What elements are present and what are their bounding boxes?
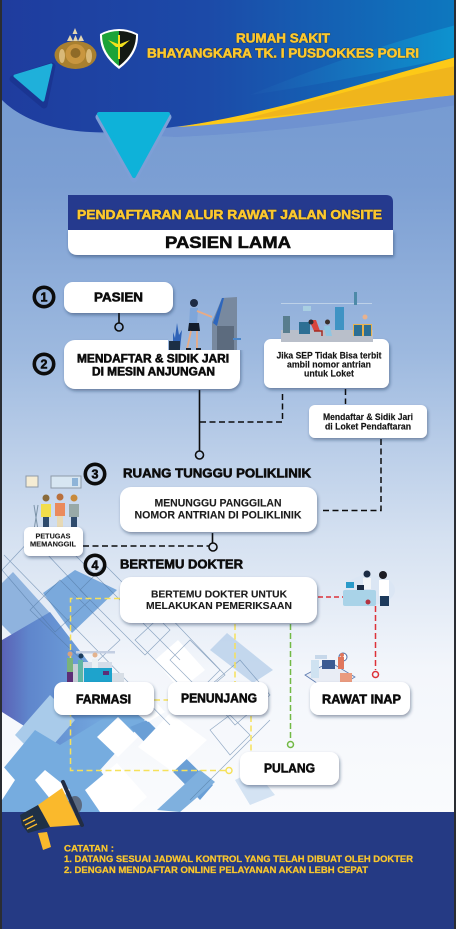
box: penunjang <box>168 682 268 715</box>
illustration: inpatient room <box>305 653 355 692</box>
box: jika SEP tidak bisa terbit: Jika SEP Tidak Bisa terbit <box>276 350 382 360</box>
step 2 badge <box>34 354 54 374</box>
footer notes: 1. DATANG SESUAI JADWAL KONTROL YANG TELAH DIBUAT OLEH DOKTER <box>64 854 413 864</box>
step 4 badge: 4 <box>92 558 99 572</box>
box: mendaftar di loket <box>309 405 427 438</box>
box: mendaftar di loket: Mendaftar & Sidik Jari <box>323 412 413 422</box>
icon: left cyan triangle <box>13 65 52 105</box>
box: menunggu panggilan: MENUNGGU PANGGILAN <box>154 498 282 510</box>
logo: police emblem <box>54 28 96 69</box>
box: pasien: PASIEN <box>94 291 143 305</box>
box: bertemu dokter untuk pemeriksaan <box>120 577 317 623</box>
box: menunggu panggilan <box>120 487 317 532</box>
header title: RUMAH SAKIT <box>236 31 330 46</box>
title panel: PENDAFTARAN ALUR RAWAT JALAN ONSITE <box>77 207 382 222</box>
box: jika SEP tidak bisa terbit: untuk Loket <box>304 368 354 378</box>
box: petugas memanggil: MEMANGGIL <box>30 540 76 549</box>
footer notes: 2. DENGAN MENDAFTAR ONLINE PELAYANAN AKAN LEBH CEPAT <box>64 865 368 875</box>
footer notes: CATATAN : <box>64 843 114 853</box>
box: rawat inap <box>310 682 410 715</box>
icon: megaphone <box>20 782 82 850</box>
box: bertemu dokter untuk pemeriksaan: MELAKUKAN PEMERIKSAAN <box>146 600 292 612</box>
header title: BHAYANGKARA TK. I PUSDOKKES POLRI <box>147 45 419 60</box>
illustration: registration counter <box>281 292 373 342</box>
box: mendaftar di mesin anjungan: DI MESIN ANJUNGAN <box>92 366 215 378</box>
box: farmasi <box>54 682 154 715</box>
header: blue wave shapes <box>2 0 456 137</box>
footer band <box>2 812 454 929</box>
step 3 badge: 3 <box>92 468 99 482</box>
box: petugas memanggil <box>24 527 83 556</box>
box: penunjang: PENUNJANG <box>181 692 257 706</box>
box: pasien <box>64 282 173 313</box>
step 3 badge <box>85 464 105 484</box>
connector: dashed black lines <box>83 389 381 546</box>
box: rawat inap: RAWAT INAP <box>322 692 401 706</box>
box: farmasi: FARMASI <box>76 692 131 706</box>
connector: green dashed path <box>288 624 294 748</box>
box: jika SEP tidak bisa terbit <box>264 336 389 388</box>
illustration: waiting patients <box>26 476 81 530</box>
icon: large cyan triangle <box>99 114 168 179</box>
connector: yellow dashed paths <box>70 598 251 774</box>
title panel <box>68 195 393 255</box>
header title <box>147 31 419 60</box>
step 4 badge <box>85 555 105 575</box>
box: jika SEP tidak bisa terbit: ambil nomor antrian <box>287 359 371 369</box>
box: bertemu dokter untuk pemeriksaan: BERTEMU DOKTER UNTUK <box>151 588 287 600</box>
box: menunggu panggilan: NOMOR ANTRIAN DI POLIKLINIK <box>134 509 302 521</box>
illustration: pharmacy counter <box>67 651 124 689</box>
title panel: PASIEN LAMA <box>165 234 291 252</box>
connector: red dashed paths <box>318 597 378 678</box>
box: mendaftar di loket: di Loket Pendaftaran <box>325 421 411 431</box>
footer notes <box>64 843 413 875</box>
illustration: patient at kiosk <box>168 297 244 350</box>
box: mendaftar di mesin anjungan <box>64 340 240 389</box>
heading: bertemu dokter: BERTEMU DOKTER <box>120 557 243 571</box>
box: pulang: PULANG <box>264 761 315 775</box>
box: petugas memanggil: PETUGAS <box>36 532 71 541</box>
geometric background pattern <box>2 538 275 812</box>
connector: solid flow lines <box>115 313 217 551</box>
heading: ruang tunggu poliklinik: RUANG TUNGGU POLIKLINIK <box>123 467 311 481</box>
illustration: doctor consultation <box>343 570 395 606</box>
logo: medical shield <box>100 29 138 69</box>
box: pulang <box>240 752 339 785</box>
step 1 badge <box>34 287 54 307</box>
box: mendaftar di mesin anjungan: MENDAFTAR & SIDIK JARI <box>77 354 229 366</box>
step 2 badge: 2 <box>41 358 48 372</box>
step 1 badge: 1 <box>41 290 48 304</box>
